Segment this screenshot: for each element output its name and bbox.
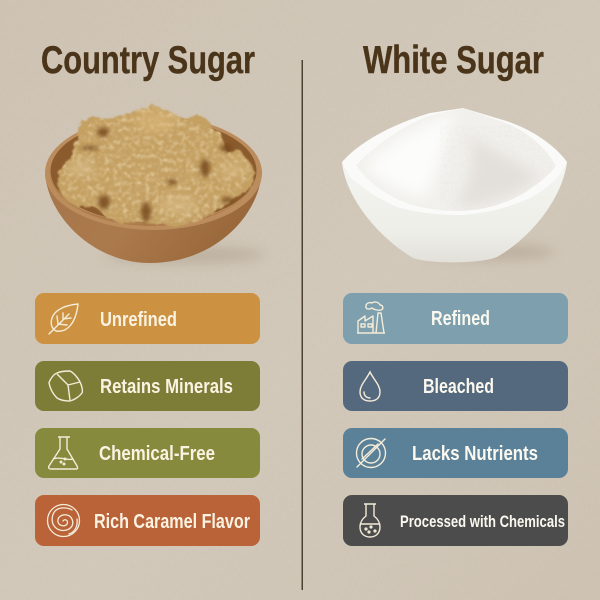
image: bowl of country sugar xyxy=(45,105,265,263)
icon: factory xyxy=(357,302,385,333)
pill: Unrefined xyxy=(35,293,260,344)
pill: Lacks Nutrients: Lacks Nutrients xyxy=(412,443,538,465)
image: bowl of white sugar xyxy=(340,100,570,262)
pill: Processed with Chemicals xyxy=(343,495,568,546)
icon: chemical flask xyxy=(360,504,380,537)
pill: Lacks Nutrients xyxy=(343,428,568,478)
icon: caramel swirl xyxy=(48,504,80,536)
pill: Chemical-Free: Chemical-Free xyxy=(99,443,215,465)
icon: mineral rock xyxy=(49,371,82,401)
icon: leaf xyxy=(49,304,78,334)
pill: Rich Caramel Flavor: Rich Caramel Flavor xyxy=(94,511,250,533)
crevices between lumps xyxy=(80,127,235,222)
pill: Refined: Refined xyxy=(431,308,490,330)
icon: flask xyxy=(49,437,78,469)
pill: Rich Caramel Flavor xyxy=(35,495,260,546)
pill: Bleached: Bleached xyxy=(423,376,494,398)
title: Country Sugar: Country Sugar xyxy=(41,39,255,82)
title: White Sugar: White Sugar xyxy=(363,39,544,82)
pill: Retains Minerals: Retains Minerals xyxy=(100,376,233,398)
pill: Refined xyxy=(343,293,568,344)
icon: water drop xyxy=(360,372,380,401)
pill: Unrefined: Unrefined xyxy=(100,309,177,331)
pill: Bleached xyxy=(343,361,568,411)
pill: Retains Minerals xyxy=(35,361,260,411)
center divider xyxy=(302,60,303,590)
pill: Chemical-Free xyxy=(35,428,260,478)
icon: no nutrients xyxy=(356,438,386,468)
